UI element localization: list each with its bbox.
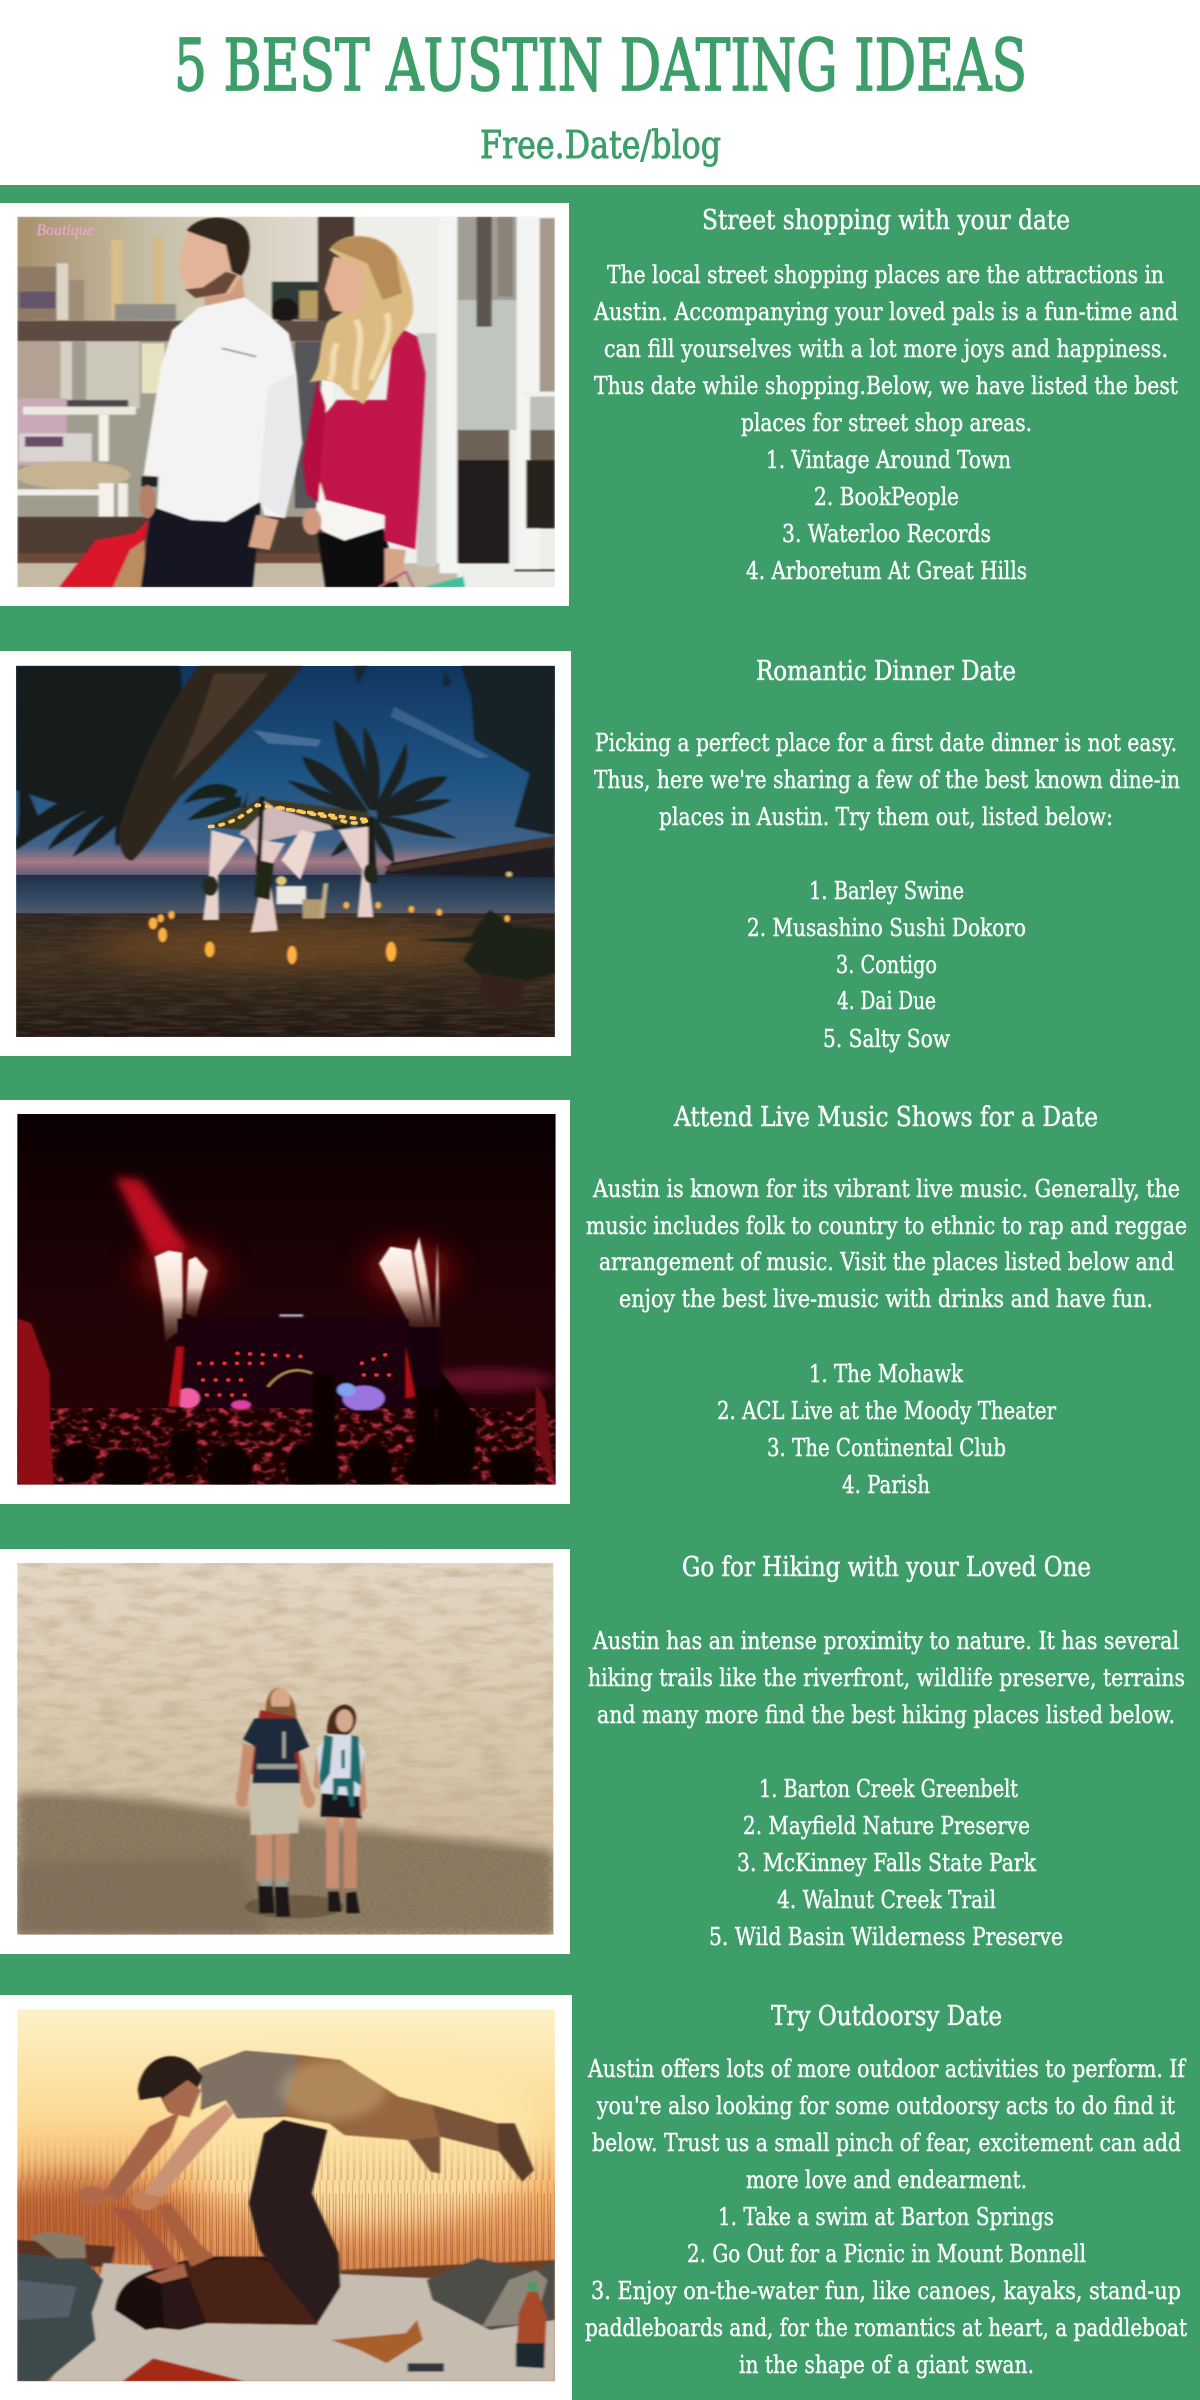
photo card: hikers — [0, 1549, 570, 1954]
list: 3. McKinney Falls State Park — [737, 1848, 1037, 1877]
string lights — [210, 805, 369, 827]
list: in the shape of a giant swan. — [739, 2350, 1034, 2379]
body text — [588, 1626, 1185, 1729]
list: 3. Contigo — [836, 950, 937, 979]
list: 2. BookPeople — [814, 482, 959, 511]
list: 1. Barton Creek Greenbelt — [759, 1774, 1018, 1803]
crowd — [17, 1318, 556, 1495]
list — [746, 445, 1027, 585]
list: 2. ACL Live at the Moody Theater — [717, 1396, 1056, 1425]
heading: Street shopping with your date — [702, 205, 1070, 236]
header — [0, 0, 1200, 185]
panel: live music — [0, 1100, 1187, 1504]
body text — [593, 260, 1178, 437]
man — [103, 2112, 180, 2200]
body text: places for street shop areas. — [741, 408, 1032, 437]
photo card: picnic couple — [0, 1995, 572, 2400]
heading: Try Outdoorsy Date — [771, 2001, 1002, 2032]
list: 5. Salty Sow — [823, 1024, 950, 1053]
list: 1. The Mohawk — [809, 1359, 964, 1388]
list: 2. Go Out for a Picnic in Mount Bonnell — [687, 2239, 1086, 2268]
list: 4. Parish — [842, 1470, 930, 1499]
panel: romantic dinner — [0, 651, 1180, 1056]
heading: Romantic Dinner Date — [756, 656, 1016, 687]
candles — [148, 902, 510, 964]
list: 5. Wild Basin Wilderness Preserve — [709, 1922, 1063, 1951]
photo card: concert — [0, 1100, 570, 1504]
list: 2. Musashino Sushi Dokoro — [747, 913, 1026, 942]
heading: Attend Live Music Shows for a Date — [673, 1102, 1098, 1133]
list: 4. Arboretum At Great Hills — [746, 556, 1027, 585]
body text — [594, 728, 1180, 831]
heading: Go for Hiking with your Loved One — [682, 1552, 1091, 1583]
panel: outdoorsy — [0, 1995, 1187, 2400]
list: 1. Vintage Around Town — [766, 445, 1011, 474]
list: 4. Dai Due — [837, 986, 936, 1015]
sign lettering: Boutique — [36, 221, 94, 239]
photo card: couple shopping — [0, 203, 569, 606]
list — [709, 1774, 1063, 1951]
body text — [586, 1174, 1187, 1313]
body text: more love and endearment. — [746, 2165, 1027, 2194]
panel: street shopping — [0, 203, 1178, 606]
list: 3. Waterloo Records — [782, 519, 991, 548]
body text — [587, 2054, 1187, 2194]
list — [717, 1359, 1056, 1499]
list: 2. Mayfield Nature Preserve — [743, 1811, 1030, 1840]
woman — [115, 2257, 318, 2330]
body text: places in Austin. Try them out, listed below: — [659, 802, 1113, 831]
list: 3. The Continental Club — [767, 1433, 1006, 1462]
list — [747, 876, 1026, 1053]
list — [585, 2202, 1187, 2379]
list: 1. Take a swim at Barton Springs — [718, 2202, 1054, 2231]
man — [264, 1688, 297, 1727]
panel: hiking — [0, 1549, 1185, 1954]
subtitle: Free.Date/blog — [480, 123, 721, 167]
photo card: beach dinner — [0, 651, 571, 1056]
stage lights — [199, 1352, 394, 1395]
list: 4. Walnut Creek Trail — [777, 1885, 996, 1914]
list: 1. Barley Swine — [809, 876, 964, 905]
woman — [327, 1705, 356, 1735]
